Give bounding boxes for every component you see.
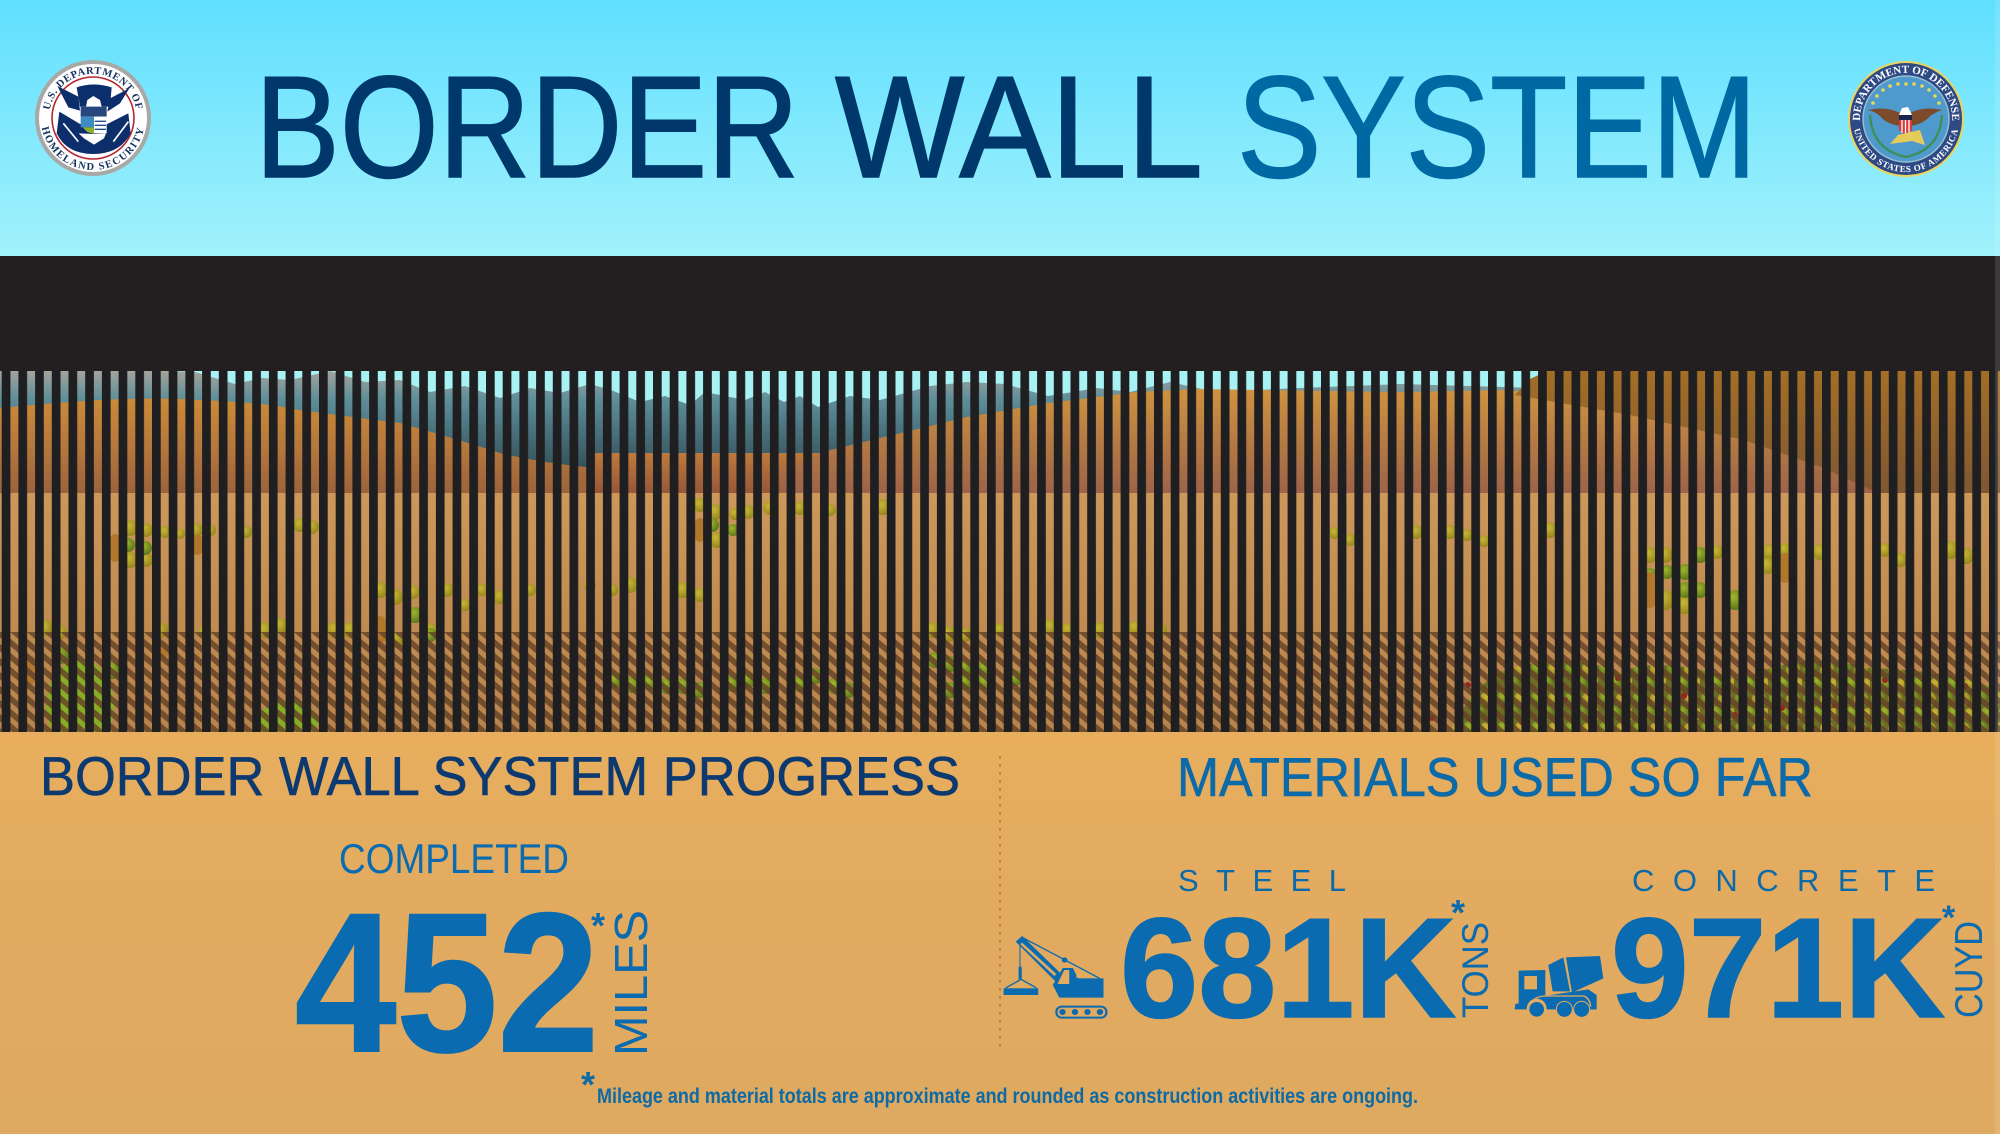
progress stat: completed miles [295,835,657,1093]
title: BORDER [255,46,799,208]
icon: Department of Homeland Security seal: U.S. DEPARTMENT OF [42,66,143,109]
header sky background [0,0,2000,257]
divider between progress and materials [999,756,1001,1047]
sand ground [0,493,2000,732]
concrete asterisk: * [1942,899,1956,937]
far right dark dune [1515,371,2000,497]
title: WALL [835,46,1203,208]
sky behind wall [0,371,2000,501]
footnote: Mileage and material totals are approximate and rounded as construction activities are ongoing. [597,1085,1418,1108]
concrete unit: CUYD [1948,921,1991,1018]
middle red dune band [590,453,910,498]
steel tons number: 681K [1120,889,1456,1048]
wall scene: desert landscape behind bollards [0,371,2000,750]
steel label: STEEL [1178,863,1346,898]
icon: Department of Defense seal: DEPARTMENT OF DEFENSE [1852,66,1960,121]
left dune [0,398,620,500]
right dune [780,389,1900,497]
miles unit: MILES [605,910,657,1056]
heading: materials: MATERIALS USED SO FAR [1177,746,1813,808]
border wall bollards [0,368,2000,732]
red flowers [1429,675,1968,725]
completed label: COMPLETED [339,835,569,882]
lower panel background [0,732,2000,1134]
mountains [0,371,1540,470]
green shrub carpet right [1450,661,2000,732]
footnote [581,1064,1418,1108]
title [255,46,1757,208]
icon: Department of Defense seal [1848,61,1964,177]
steel unit: TONS [1455,922,1496,1018]
icon: Department of Homeland Security seal [35,60,151,176]
icon: crane [1004,936,1106,1018]
wall top beam [0,256,2000,371]
bright green foreground shrubs left [46,660,318,750]
scrub bushes [37,498,1974,648]
footnote: * [581,1064,595,1105]
asterisk: * [591,905,605,946]
icon: concrete mixer truck [1515,956,1603,1019]
icon: Department of Homeland Security seal: HOMELAND SECURITY [42,126,144,170]
title: SYSTEM [1237,46,1757,208]
foreground diagonal shadow of wall [0,632,2000,732]
miles number: 452 [295,872,599,1093]
concrete cuyd number: 971K [1611,889,1945,1048]
right edge light strip [1995,0,2000,1134]
heading: progress: BORDER WALL SYSTEM PROGRESS [40,745,960,807]
icon: Department of Defense seal: UNITED STATES OF AMERICA [1854,128,1958,172]
steel asterisk: * [1451,892,1465,933]
concrete label: CONCRETE [1632,863,1935,898]
